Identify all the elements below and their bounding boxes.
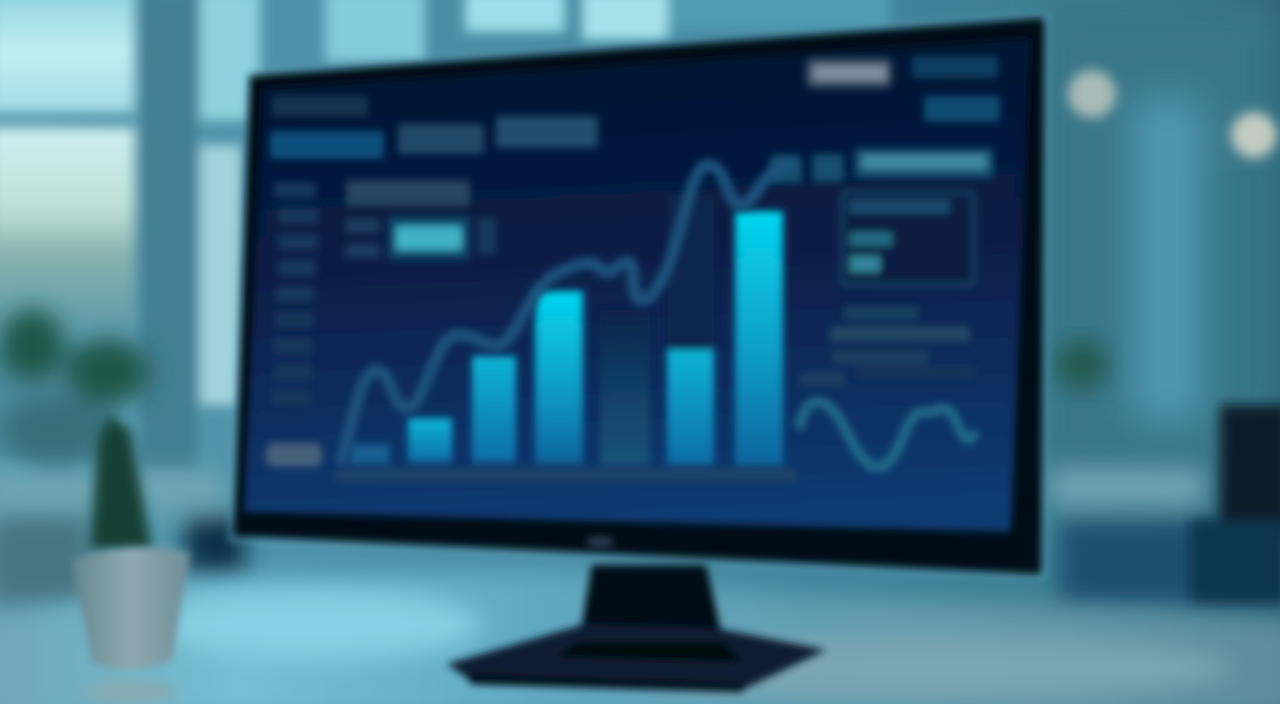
monitor bbox=[232, 16, 1046, 692]
monitor logo bbox=[586, 536, 614, 548]
kpi card bbox=[346, 180, 496, 260]
background desk left bbox=[0, 472, 245, 605]
plant foliage bbox=[0, 309, 150, 464]
trend line bbox=[342, 165, 790, 460]
window panes bbox=[0, 0, 890, 470]
table surface bbox=[0, 570, 1280, 704]
y axis labels bbox=[272, 182, 318, 406]
plant stem bbox=[90, 415, 152, 550]
bar chart bbox=[336, 195, 796, 482]
sparkline bbox=[800, 402, 974, 467]
info panel bbox=[842, 192, 974, 284]
axis button bbox=[266, 443, 322, 467]
dark chair bbox=[1190, 405, 1280, 605]
monitor bezel bbox=[234, 18, 1044, 574]
text lines bbox=[800, 306, 975, 386]
plant pot bbox=[72, 548, 190, 670]
pot reflection bbox=[84, 680, 176, 704]
background desk right bbox=[1050, 468, 1280, 605]
bokeh lights bbox=[1068, 70, 1277, 158]
monitor halo bbox=[232, 16, 1046, 576]
background plant right bbox=[1056, 341, 1108, 389]
monitor screen bbox=[244, 38, 1031, 532]
monitor stand bbox=[447, 565, 826, 692]
right side wall and light strip bbox=[1040, 0, 1280, 480]
dashboard header buttons bbox=[270, 56, 1000, 183]
